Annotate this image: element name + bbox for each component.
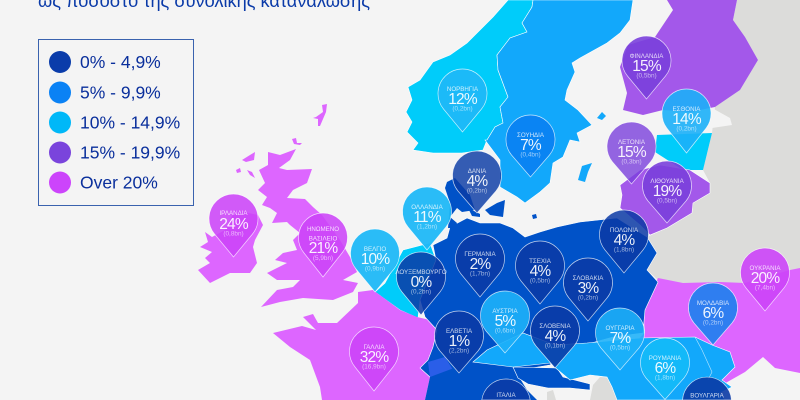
pin: Norway: [438, 69, 487, 132]
pin: Netherlands: [402, 187, 452, 250]
pin: United Kingdom: ΒΑΣΙΛΕΙΟ: [309, 236, 337, 242]
pin: Slovakia: 3%: [578, 280, 599, 297]
pin: Bulgaria: ΒΟΥΛΓΑΡΙΑ: [690, 392, 725, 400]
pin: United Kingdom: (5,9bn): [313, 255, 333, 262]
pin: Netherlands: ΟΛΛΑΝΔΙΑ: [411, 204, 444, 211]
pin: Estonia: 14%: [672, 111, 702, 128]
pin: Belgium: 10%: [361, 251, 390, 268]
pin: Romania: ΡΟΥΜΑΝΙΑ: [649, 355, 682, 362]
pin: Germany: 2%: [470, 256, 491, 273]
pin: Luxembourg: (0,2bn): [411, 288, 431, 296]
pin: Finland: ΦΙΝΛΑΝΔΙΑ: [630, 53, 664, 60]
pin: Netherlands: (1,2bn): [417, 224, 437, 230]
pin: Norway: ΝΟΡΒΗΓΙΑ: [447, 86, 479, 93]
pin: Austria: [480, 291, 530, 353]
pin: Norway: 12%: [448, 91, 478, 108]
pin: Slovakia: [564, 258, 612, 321]
pin: Germany: ΓΕΡΜΑΝΙΑ: [464, 251, 496, 258]
pin: Moldova: ΜΟΛΔΑΒΙΑ: [697, 300, 730, 307]
pin: Sweden: (0,4bn): [520, 152, 541, 158]
pin: Switzerland: [434, 311, 484, 373]
pin: Lithuania: (0,5bn): [657, 198, 677, 204]
pin: Switzerland: 1%: [449, 333, 470, 350]
pin: Slovakia: ΣΛΟΒΑΚΙΑ: [573, 275, 604, 282]
legend: 10% - 14,9%: [80, 112, 180, 132]
pin: Estonia: (0,2bn): [676, 126, 697, 132]
pin: Denmark: [452, 151, 502, 213]
pin: Moldova: (0,2bn): [703, 320, 723, 326]
pin: France: 32%: [360, 349, 389, 366]
pin: Ireland: 24%: [219, 216, 249, 233]
pin: Ukraine: (7,4bn): [755, 284, 775, 292]
pin: Denmark: ΔΑΝΙΑ: [468, 168, 487, 175]
pin: Slovenia: ΣΛΟΒΕΝΙΑ: [539, 323, 571, 330]
map of Europe: [198, 0, 800, 400]
pin: Luxembourg: 0%: [411, 274, 432, 291]
pin: France: [350, 327, 398, 391]
pin: Czechia: [516, 241, 564, 304]
pin: France: (16,9bn): [362, 364, 386, 370]
pin: Belgium: [350, 229, 400, 292]
pin: Bulgaria: [683, 377, 731, 400]
pin: Germany: (1,7bn): [470, 270, 490, 278]
pin: Slovakia: (0,2bn): [578, 294, 598, 302]
legend: Over 20%: [80, 172, 158, 192]
pin: Hungary: (0,5bn): [610, 344, 630, 352]
pin: Ukraine: ΟΥΚΡΑΝΙΑ: [750, 265, 781, 272]
legend: 0% - 4,9%: [80, 52, 161, 72]
pin: Czechia: ΤΣΕΧΙΑ: [529, 258, 552, 265]
pin: Romania: 6%: [655, 360, 676, 377]
pin: Romania: [640, 338, 690, 400]
pin: Latvia: [607, 122, 656, 184]
pin: Norway: (0,2bn): [452, 106, 473, 112]
pin: Sweden: ΣΟΥΗΔΙΑ: [517, 132, 545, 139]
pin: Germany: [456, 234, 504, 297]
pin: Hungary: ΟΥΓΓΑΡΙΑ: [605, 325, 635, 332]
pin: Hungary: 7%: [610, 330, 631, 347]
pin: Latvia: ΛΕΤΟΝΙΑ: [618, 139, 646, 146]
pin: United Kingdom: [298, 213, 348, 277]
pin: Finland: [622, 36, 671, 99]
pin: Ukraine: [740, 248, 790, 311]
pin: Finland: (0,5bn): [636, 72, 657, 80]
pin: Italy: ΙΤΑΛΙΑ: [496, 392, 516, 399]
pin: Belgium: (0,9bn): [365, 266, 385, 272]
pin: Moldova: 6%: [703, 305, 724, 322]
pin: Sweden: 7%: [520, 137, 542, 154]
pin: France: ΓΑΛΛΙΑ: [363, 344, 385, 351]
pin: Finland: 15%: [632, 58, 662, 75]
pin: Slovenia: (0,1bn): [545, 342, 565, 350]
pin: Romania: (1,8bn): [655, 374, 675, 382]
pin: Slovenia: [530, 306, 580, 368]
pin: Latvia: 15%: [617, 144, 647, 161]
pin: Austria: (0,6bn): [495, 328, 515, 334]
pin: Moldova: [688, 283, 738, 345]
pin: Austria: ΑΥΣΤΡΙΑ: [492, 308, 519, 315]
pin: Netherlands: 11%: [413, 209, 442, 226]
pin: Poland: [600, 210, 648, 273]
pin: Ireland: ΙΡΛΑΝΔΙΑ: [219, 210, 248, 217]
pin: Hungary: [596, 308, 644, 370]
pin: Estonia: ΕΣΘΟΝΙΑ: [673, 106, 701, 113]
pin: Luxembourg: ΛΟΥΞΕΜΒΟΥΡΓΟ: [395, 269, 447, 276]
pin: Switzerland: (2,2bn): [449, 348, 469, 354]
pin: Estonia: [662, 89, 711, 153]
pin: Czechia: 4%: [530, 263, 551, 280]
pin: Switzerland: ΕΛΒΕΤΙΑ: [446, 328, 473, 335]
pin: Denmark: 4%: [467, 173, 488, 190]
pin: Poland: ΠΟΛΩΝΙΑ: [610, 227, 639, 234]
pin: United Kingdom: 21%: [309, 240, 338, 257]
legend: 15% - 19,9%: [80, 142, 180, 162]
pin: Denmark: (0,2bn): [467, 188, 487, 194]
pin: Austria: 5%: [495, 313, 516, 330]
pin: Belgium: ΒΕΛΓΙΟ: [364, 246, 386, 253]
pin: Sweden: [506, 115, 555, 177]
pin: Ireland: (0,8bn): [223, 230, 244, 238]
legend: 5% - 9,9%: [80, 82, 161, 102]
pin: Lithuania: ΛΙΘΟΥΑΝΙΑ: [650, 178, 685, 185]
pin: Poland: 4%: [614, 232, 635, 249]
pin: Ukraine: 20%: [751, 270, 780, 287]
pin: Czechia: (0,5bn): [530, 278, 550, 284]
legend: [38, 40, 194, 206]
pin: Lithuania: [642, 161, 692, 223]
pin: Poland: (1,8bn): [614, 246, 634, 254]
pin: Ireland: [209, 194, 258, 257]
pin: United Kingdom: ΗΝΩΜΕΝΟ: [307, 226, 339, 233]
pin: Italy: [482, 379, 530, 400]
pin: Slovenia: 4%: [545, 328, 566, 345]
pin: Luxembourg: [395, 252, 447, 315]
pin: Lithuania: 19%: [653, 183, 682, 200]
pin: Latvia: (0,3bn): [621, 158, 642, 166]
